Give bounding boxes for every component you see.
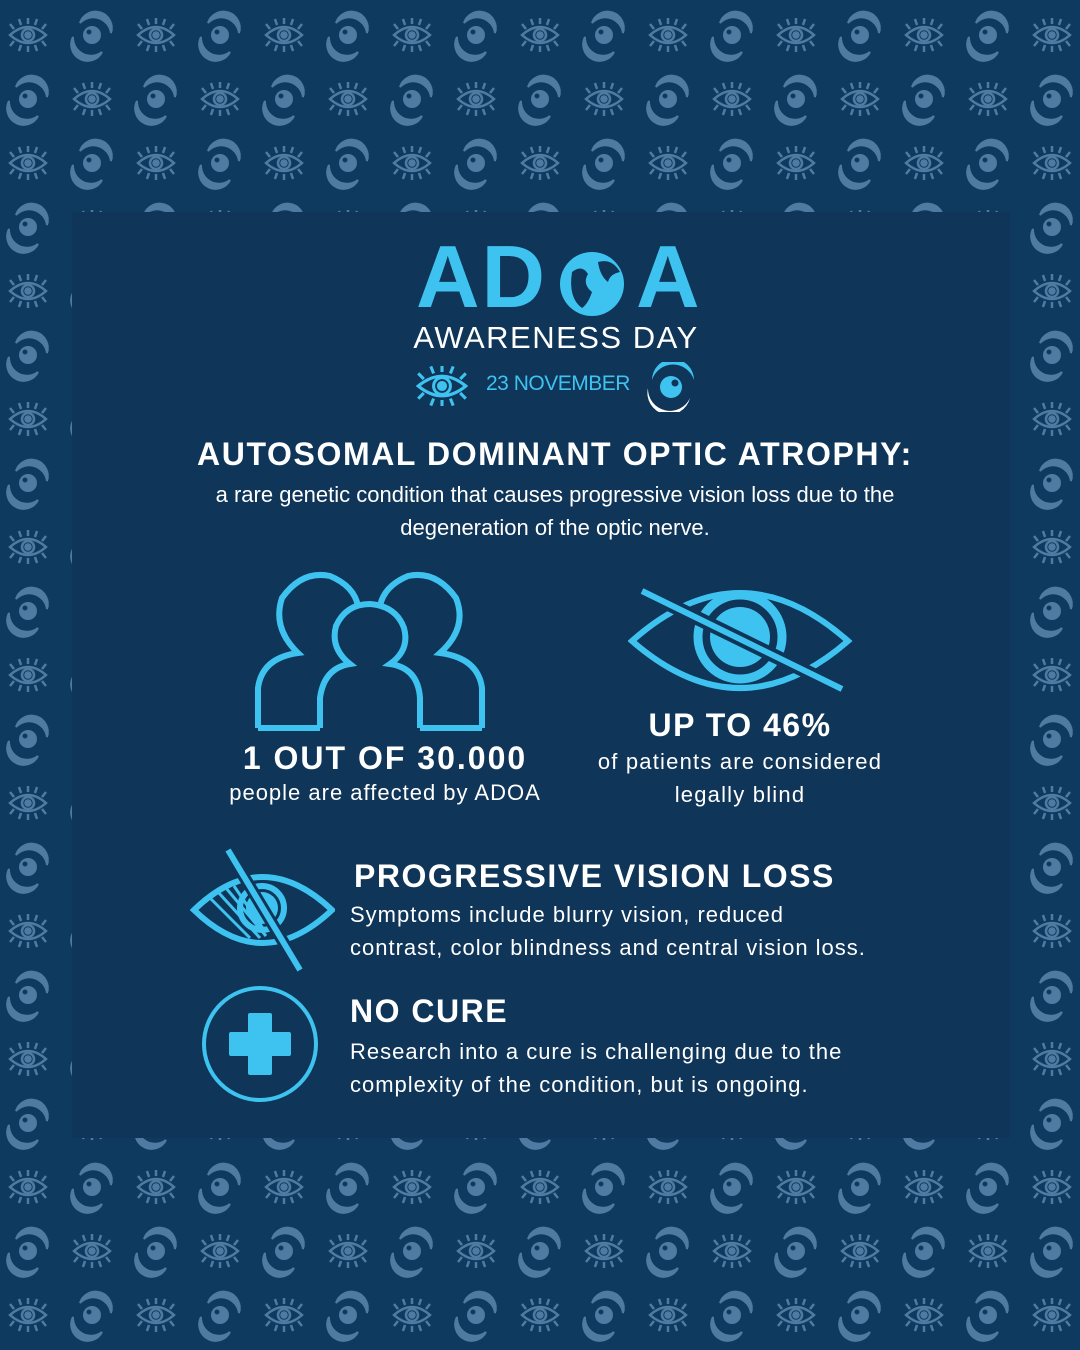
heading: AUTOSOMAL DOMINANT OPTIC ATROPHY: — [197, 436, 913, 472]
icon: globe — [560, 252, 624, 316]
icon: crossed eye — [628, 588, 852, 692]
date row — [416, 362, 694, 412]
section: progressive vision loss: PROGRESSIVE VISION LOSS — [354, 858, 835, 894]
icon: eye lashes — [416, 366, 468, 406]
logo: ADOA — [416, 227, 700, 326]
stat: blind: of patients are considered legally blind — [598, 749, 882, 807]
section: no cure — [202, 986, 842, 1102]
stat: people: 1 OUT OF 30.000 — [243, 740, 527, 776]
logo: ADOA: AD — [416, 227, 547, 326]
logo: ADOA: A — [636, 227, 700, 326]
icon: crescent eye — [647, 362, 694, 412]
stat: people — [229, 572, 541, 805]
stat: blind — [598, 588, 882, 807]
date row: 23 NOVEMBER — [486, 372, 630, 395]
subtitle: awareness day: AWARENESS DAY — [413, 320, 699, 355]
section: no cure: Research into a cure is challenging due to the complexity of the condition, but is ongoing. — [350, 1039, 842, 1097]
section: no cure: NO CURE — [350, 993, 508, 1029]
section: progressive vision loss — [190, 848, 866, 972]
stat: blind: UP TO 46% — [648, 707, 832, 743]
icon: plus circle — [202, 986, 318, 1102]
icon: people — [255, 572, 485, 731]
stat: people: people are affected by ADOA — [229, 780, 541, 805]
section: progressive vision loss: Symptoms include blurry vision, reduced contrast, color blindness and central vision loss. — [350, 902, 866, 960]
icon: blurred eye — [190, 848, 335, 972]
definition text: a rare genetic condition that causes progressive vision loss due to the degeneration of the optic nerve. — [216, 482, 894, 540]
